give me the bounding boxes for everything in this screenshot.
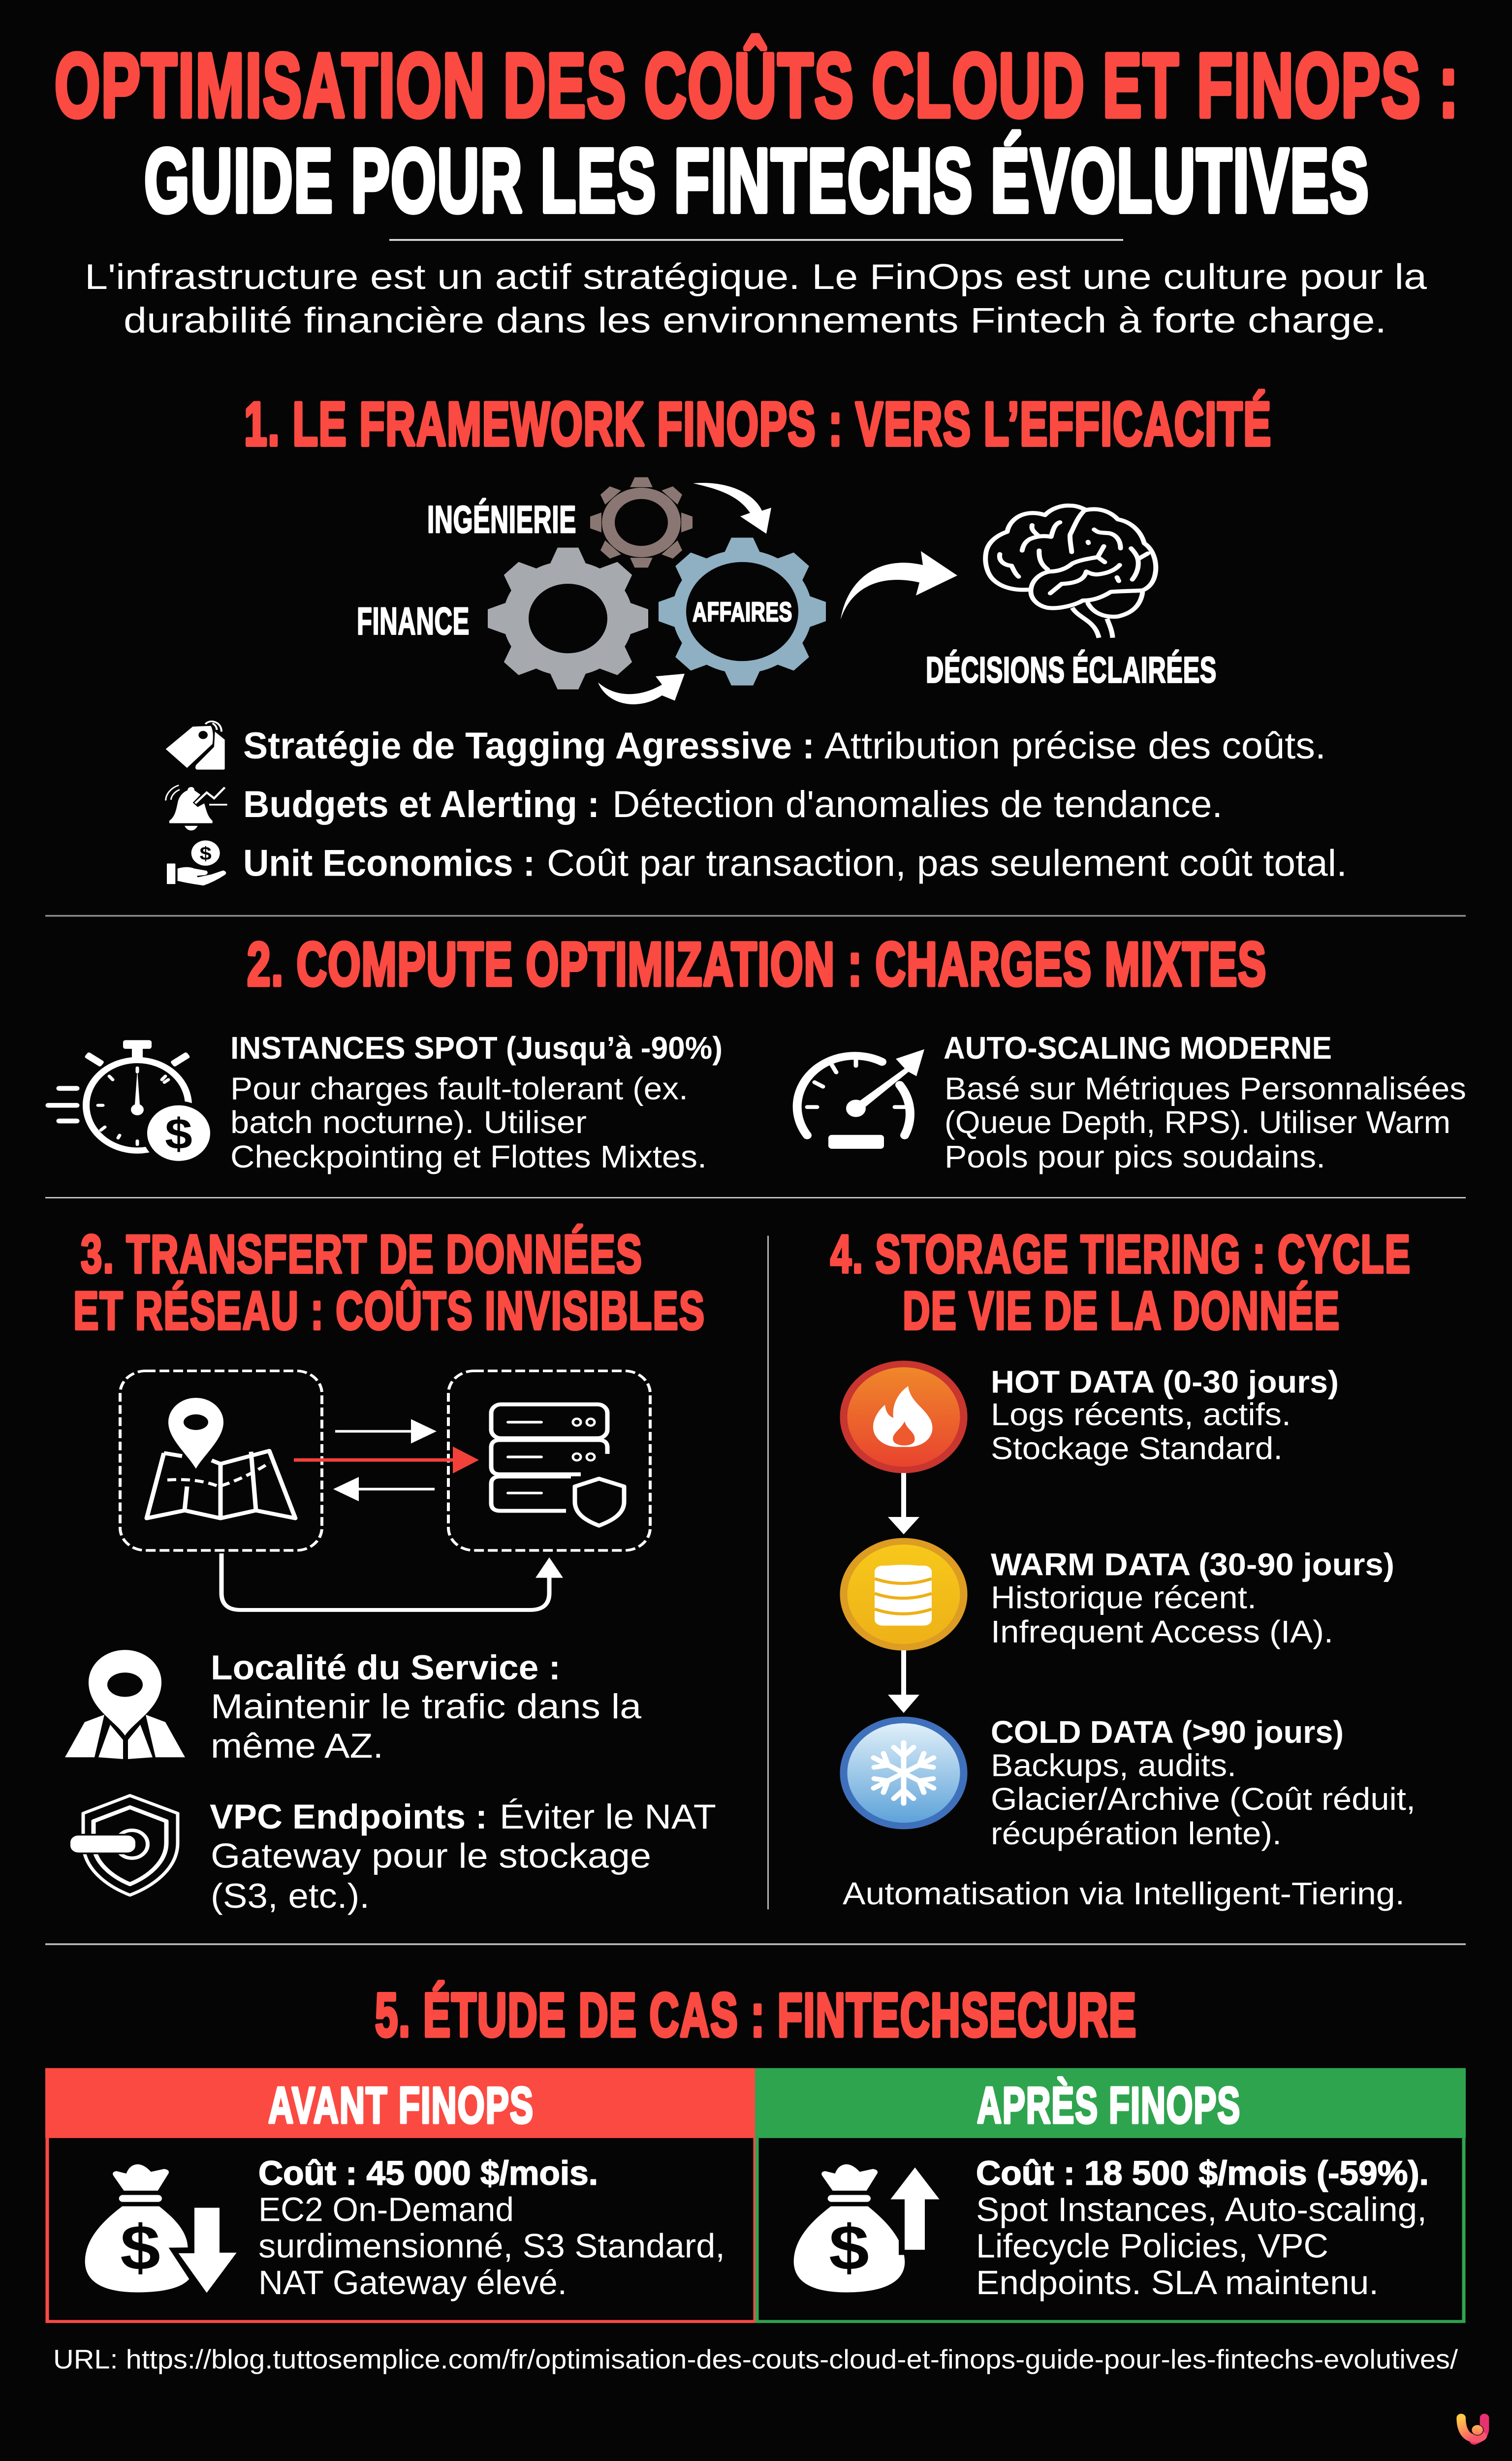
box: local service bbox=[120, 1371, 322, 1550]
subtitle bbox=[85, 257, 1427, 340]
arrow: left bbox=[333, 1477, 435, 1501]
text: vpc endpoints: (S3, etc.). bbox=[211, 1876, 370, 1915]
text: cold data: Backups, audits. bbox=[991, 1748, 1236, 1783]
text: avant: NAT Gateway élevé. bbox=[258, 2263, 567, 2302]
text: vpc endpoints: Éviter le NAT bbox=[500, 1797, 716, 1836]
heading: section 3: ET RÉSEAU : COÛTS INVISIBLES bbox=[73, 1280, 705, 1341]
icon: cold data snowflake bbox=[844, 1720, 964, 1826]
text: avant: surdimensionné, S3 Standard, bbox=[258, 2227, 725, 2265]
heading: section 3: 3. TRANSFERT DE DONNÉES bbox=[81, 1224, 643, 1284]
text: après: Lifecycle Policies, VPC bbox=[976, 2227, 1328, 2265]
text: instances spot: Pour charges fault-tolerant (ex. bbox=[230, 1072, 688, 1106]
text: cold data: récupération lente). bbox=[991, 1817, 1282, 1851]
list: FinOps practices: Détection d'anomalies de tendance. bbox=[612, 784, 1223, 825]
icon: brain bbox=[985, 505, 1156, 638]
text: warm data: WARM DATA (30-90 jours) bbox=[991, 1547, 1394, 1582]
arrow: hot to warm bbox=[888, 1473, 919, 1534]
text: auto-scaling: Basé sur Métriques Personnalisées bbox=[945, 1072, 1466, 1106]
text: service locality: même AZ. bbox=[211, 1727, 383, 1765]
heading: instances spot: INSTANCES SPOT (Jusqu’à -90%) bbox=[230, 1031, 723, 1066]
icon: money bag up bbox=[794, 2163, 945, 2292]
diagram: data transfer bbox=[120, 1371, 650, 1610]
arrow: top curved bbox=[693, 483, 771, 534]
label: finance: FINANCE bbox=[357, 599, 470, 642]
text: warm data: Infrequent Access (IA). bbox=[991, 1615, 1333, 1649]
arrow: red right bbox=[294, 1447, 479, 1474]
arrow: right bbox=[335, 1419, 437, 1444]
panel: instances spot bbox=[48, 1031, 723, 1174]
text: automation note: Automatisation via Intelligent-Tiering. bbox=[843, 1877, 1405, 1911]
text: cold data: Glacier/Archive (Coût réduit, bbox=[991, 1782, 1416, 1817]
text: instances spot bbox=[230, 1072, 707, 1174]
label: décisions éclairées: DÉCISIONS ÉCLAIRÉES bbox=[926, 649, 1217, 690]
list: FinOps practices bbox=[166, 722, 1347, 885]
subtitle: L'infrastructure est un actif stratégique. Le FinOps est une culture pour la bbox=[85, 257, 1427, 297]
text: avant: Coût : 45 000 $/mois. bbox=[258, 2154, 598, 2192]
icon: hot data flame bbox=[844, 1364, 964, 1470]
text: unit economics: Unit Economics : bbox=[243, 843, 535, 884]
arrow: warm to cold bbox=[888, 1650, 919, 1713]
text: après: Spot Instances, Auto-scaling, bbox=[976, 2190, 1427, 2229]
panel: before FinOps bbox=[45, 2068, 755, 2322]
text: service locality bbox=[211, 1648, 641, 1765]
title bbox=[55, 34, 1459, 231]
text: vpc endpoints: VPC Endpoints : bbox=[210, 1797, 487, 1836]
list: FinOps practices: Coût par transaction, pas seulement coût total. bbox=[547, 843, 1347, 884]
heading: section 3 bbox=[73, 1224, 705, 1341]
text: hot data: Stockage Standard. bbox=[991, 1431, 1283, 1466]
text: hot data bbox=[991, 1365, 1339, 1466]
text: vpc endpoints: Gateway pour le stockage bbox=[211, 1836, 651, 1875]
text: cold data: COLD DATA (>90 jours) bbox=[991, 1715, 1344, 1750]
label: ingénierie: INGÉNIERIE bbox=[427, 498, 576, 541]
arrow: bottom curved bbox=[598, 674, 685, 704]
box: après bbox=[757, 2138, 1464, 2322]
heading: avant: AVANT FINOPS bbox=[268, 2076, 534, 2134]
gear: ingénierie bbox=[590, 477, 693, 568]
gear: finance bbox=[488, 548, 648, 690]
text: auto-scaling: Pools pour pics soudains. bbox=[945, 1140, 1325, 1174]
icon: stopwatch with dollar: $ bbox=[165, 1109, 192, 1158]
icon: tags bbox=[166, 722, 225, 770]
text: warm data bbox=[991, 1547, 1394, 1649]
subtitle: durabilité financière dans les environnements Fintech à forte charge. bbox=[124, 301, 1386, 340]
icon: money bag down bbox=[85, 2164, 237, 2293]
icon: warm data database bbox=[844, 1541, 964, 1647]
text: tagging: Stratégie de Tagging Agressive : bbox=[243, 726, 815, 767]
text: instances spot: batch nocturne). Utiliser bbox=[230, 1105, 587, 1140]
icon: stopwatch with dollar bbox=[48, 1040, 213, 1163]
text: avant bbox=[258, 2154, 725, 2302]
text: warm data: Historique récent. bbox=[991, 1580, 1257, 1615]
panel: service locality bbox=[65, 1648, 641, 1765]
text: service locality: Maintenir le trafic dans la bbox=[211, 1687, 641, 1726]
logo bbox=[1461, 2418, 1484, 2440]
icon: location map bbox=[65, 1650, 185, 1759]
panel: auto-scaling bbox=[797, 1031, 1466, 1174]
arrow: bypass connector bbox=[221, 1553, 563, 1610]
header bar: après bbox=[755, 2068, 1466, 2138]
icon: shield with endpoint bbox=[69, 1796, 178, 1895]
label: affaires: AFFAIRES bbox=[693, 597, 792, 627]
icon: money bag down: $ bbox=[120, 2212, 160, 2283]
text: cold data bbox=[991, 1715, 1416, 1851]
box: avant bbox=[47, 2138, 755, 2322]
box: secure server bbox=[448, 1371, 650, 1550]
list: FinOps practices: Attribution précise des coûts. bbox=[824, 726, 1326, 767]
text: hot data: Logs récents, actifs. bbox=[991, 1397, 1291, 1432]
panel: vpc endpoints bbox=[69, 1796, 716, 1915]
text: hot data: HOT DATA (0-30 jours) bbox=[991, 1365, 1339, 1399]
timeline: storage tiers bbox=[843, 1364, 1416, 1911]
heading: auto-scaling: AUTO-SCALING MODERNE bbox=[944, 1031, 1332, 1066]
icon: hand with coin: $ bbox=[200, 843, 212, 864]
diagram: FinOps gears bbox=[357, 477, 1217, 704]
text: avant: EC2 On-Demand bbox=[258, 2190, 514, 2229]
arrow: to brain bbox=[841, 551, 957, 619]
text: auto-scaling: (Queue Depth, RPS). Utiliser Warm bbox=[945, 1105, 1450, 1140]
icon: hand with coin bbox=[167, 841, 226, 885]
text: après: Endpoints. SLA maintenu. bbox=[976, 2263, 1379, 2302]
text: après: Coût : 18 500 $/mois (-59%). bbox=[976, 2154, 1429, 2192]
panel: after FinOps bbox=[755, 2068, 1466, 2322]
header bar: avant bbox=[45, 2068, 755, 2138]
heading: section 4 bbox=[830, 1224, 1411, 1341]
gear: affaires bbox=[659, 537, 826, 686]
text: auto-scaling bbox=[945, 1072, 1466, 1174]
icon: gauge bbox=[797, 1049, 924, 1149]
text: instances spot: Checkpointing et Flottes Mixtes. bbox=[230, 1140, 707, 1174]
text: vpc endpoints bbox=[210, 1797, 716, 1915]
icon: bell with trend bbox=[166, 785, 227, 830]
icon: server with shield bbox=[491, 1404, 624, 1526]
heading: après: APRÈS FINOPS bbox=[977, 2076, 1241, 2134]
text: après bbox=[976, 2154, 1429, 2302]
icon: map pin bbox=[147, 1398, 295, 1518]
text: budgets: Budgets et Alerting : bbox=[243, 784, 599, 825]
icon: money bag up: $ bbox=[829, 2212, 869, 2283]
text: service locality: Localité du Service : bbox=[211, 1648, 561, 1687]
